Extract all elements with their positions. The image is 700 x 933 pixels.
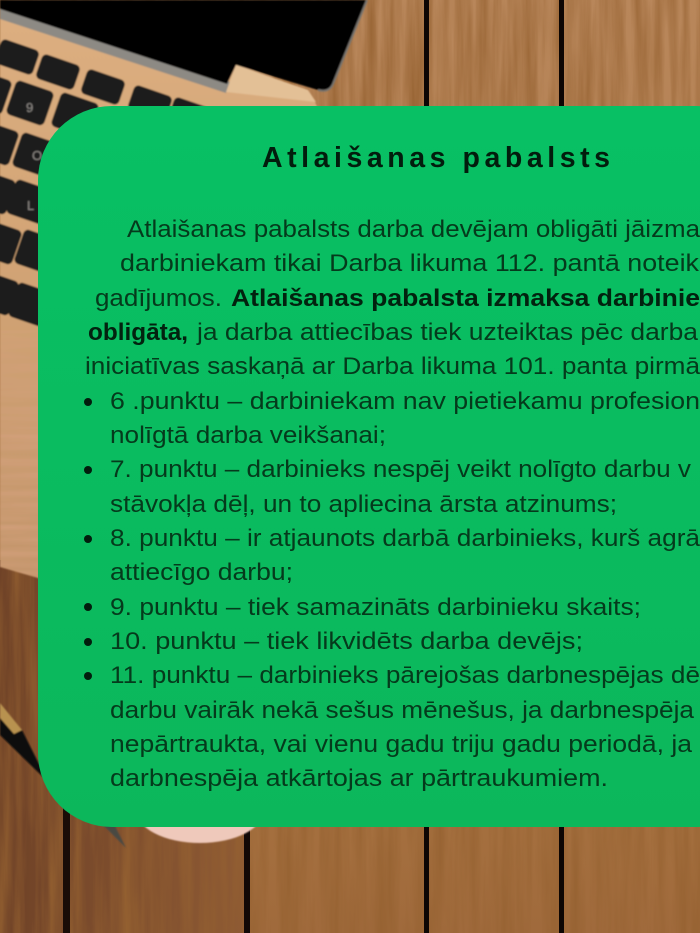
list item: 11. punkts [110, 662, 700, 792]
key glyphs: L [27, 198, 34, 213]
title: Atlaišanas pabalsts [262, 142, 610, 174]
list item: 7. punkts: 7. punktu – darbinieks nespēj veikt nolīgto darbu v [110, 456, 692, 483]
list item: 8. punkts: attiecīgo darbu; [110, 559, 293, 586]
list item: 8. punkts [110, 525, 700, 586]
list item: 8. punkts: 8. punktu – ir atjaunots darbā darbinieks, kurš agrā [110, 525, 700, 552]
hinge [0, 8, 230, 93]
keyboard keys [0, 38, 213, 329]
intro paragraph: ja darba attiecības tiek uzteiktas pēc darba [196, 319, 698, 346]
bullet list [84, 388, 700, 792]
list item: 7. punkts: stāvokļa dēļ, un to apliecina ārsta atzinums; [110, 491, 617, 518]
intro paragraph [85, 216, 700, 380]
list item: 11. punkts: darbnespēja atkārtojas ar pārtraukumiem. [110, 765, 608, 792]
hinge tab [226, 65, 316, 102]
laptop screen [0, 0, 367, 91]
list item: 11. punkts: 11. punktu – darbinieks pārejošas darbnespējas dē [110, 662, 700, 689]
laptop [0, 0, 367, 590]
list item: 10. punkts: 10. punktu – tiek likvidēts darba devējs; [110, 628, 583, 655]
list item: 7. punkts [110, 456, 692, 518]
list item: 11. punkts: nepārtraukta, vai vienu gadu triju gadu periodā, ja [110, 731, 692, 758]
key glyphs: 9 [26, 100, 33, 115]
panel: green card [38, 106, 700, 827]
bullet markers [84, 398, 92, 680]
list item: 9. punkts: 9. punktu – tiek samazināts darbinieku skaits; [110, 594, 641, 621]
list item: 6. punkts: 6 .punktu – darbiniekam nav pietiekamu profesion [110, 388, 700, 415]
laptop wood grain [0, 436, 38, 573]
intro paragraph: gadījumos. [95, 285, 222, 312]
pen [0, 703, 126, 848]
laptop body [0, 14, 318, 590]
intro paragraph: obligāta, [88, 319, 188, 346]
intro paragraph: iniciatīvas saskaņā ar Darba likuma 101. panta pirmā [85, 353, 700, 380]
list item: 6. punkts: nolīgtā darba veikšanai; [110, 422, 386, 449]
pink plate [136, 777, 264, 843]
intro paragraph: Atlaišanas pabalsta izmaksa darbinie [231, 285, 700, 312]
key glyphs [26, 100, 42, 213]
key glyphs: O [32, 148, 42, 163]
intro paragraph: darbiniekam tikai Darba likuma 112. pantā noteik [120, 250, 700, 277]
list item: 11. punkts: darbu vairāk nekā sešus mēnešus, ja darbnespēja [110, 697, 694, 724]
intro paragraph: Atlaišanas pabalsts darba devējam obligāti jāizma [127, 216, 700, 243]
list item: 6. punkts [110, 388, 700, 449]
